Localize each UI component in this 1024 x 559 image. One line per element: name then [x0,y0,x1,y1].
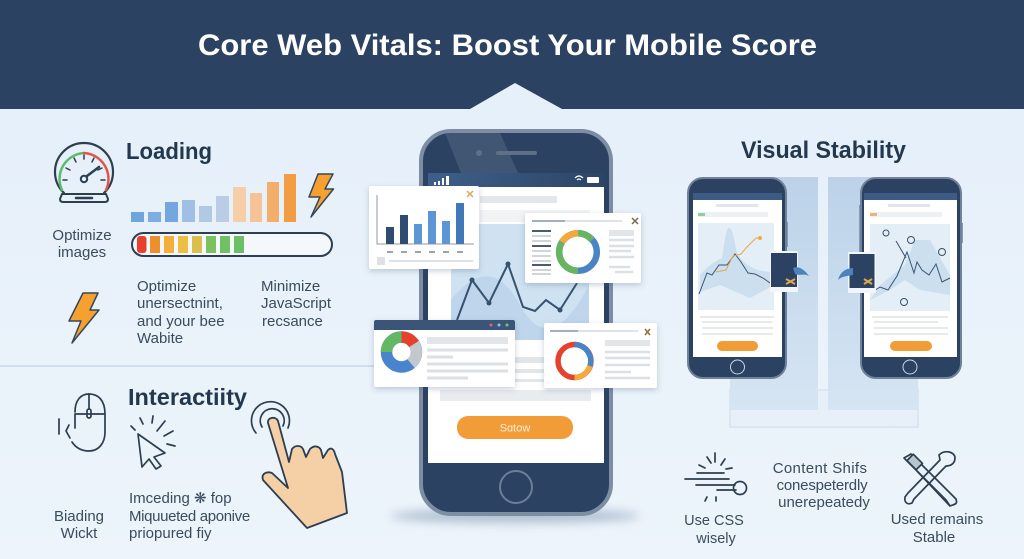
panel: interactivity [54,384,347,542]
text: minimize javascript: recsance [262,313,323,330]
text: content shifts: conespeterdly [777,477,868,494]
text: use css wisely: Use CSS [684,513,744,529]
icon: crossed tools [904,452,957,506]
floating card left [770,251,809,292]
icon: cursor click [131,416,175,469]
card: donut one [525,213,641,283]
text: biading wickt: Biading [54,508,104,525]
text: optimize website: unersectnint, [137,295,223,312]
text: content shifts: Content Shifs [773,460,867,477]
text: optimize website: and your bee [137,313,225,330]
text: used remains stable: Stable [913,529,955,546]
heading: loading: Loading [126,138,212,164]
title: Core Web Vitals: Boost Your Mobile Score [198,29,817,62]
text: optimize images: images [58,244,106,261]
icon: speedometer gauge [55,143,113,202]
heading: interactivity: Interactiity [128,384,247,410]
text: biading wickt: Wickt [61,525,98,542]
text: optimize website: Wabite [137,330,183,347]
floating card right [838,252,876,293]
icon: lightning bolt lower [69,293,99,343]
text: content shifts: unerepeatedy [778,494,870,511]
panel: loading [52,138,334,347]
phone reflection [445,133,518,173]
status bar [428,173,604,187]
button [457,416,573,439]
phone body [421,131,611,514]
text: minimize javascript: JavaScript [261,295,332,312]
card: donut two [374,320,515,387]
text: interaction notes: priopured fiy [129,525,212,542]
background panels [730,177,918,427]
icon: mouse [59,394,105,451]
text: optimize images: Optimize [52,227,112,244]
header banner [0,0,1024,109]
bar chart: loading bars [131,174,296,222]
icon: lightning bolt upper [309,174,334,217]
card: donut three [544,323,657,388]
heading: visual stability: Visual Stability [741,137,907,164]
icon: pointing hand [251,402,347,528]
text: used remains stable: Used remains [891,511,983,528]
left small phone [687,178,788,378]
right small phone [859,178,963,378]
text: interaction notes: Miquueted aponive [129,508,250,525]
icon: wind [685,453,746,501]
button: Sɑtow [500,422,530,434]
central phone [390,131,640,523]
card: bar chart [369,186,479,269]
text: optimize website: Optimize [137,278,196,295]
phone screen [428,187,604,463]
text: interaction notes: Imceding ❋ fop [129,490,232,507]
phone shadow [390,509,640,523]
home button [500,471,532,503]
text: minimize javascript: Minimize [261,278,320,295]
panel: visual stability [684,137,983,547]
text: use css wisely: wisely [695,531,736,547]
screen chart [451,224,589,340]
progress bar [132,233,332,256]
